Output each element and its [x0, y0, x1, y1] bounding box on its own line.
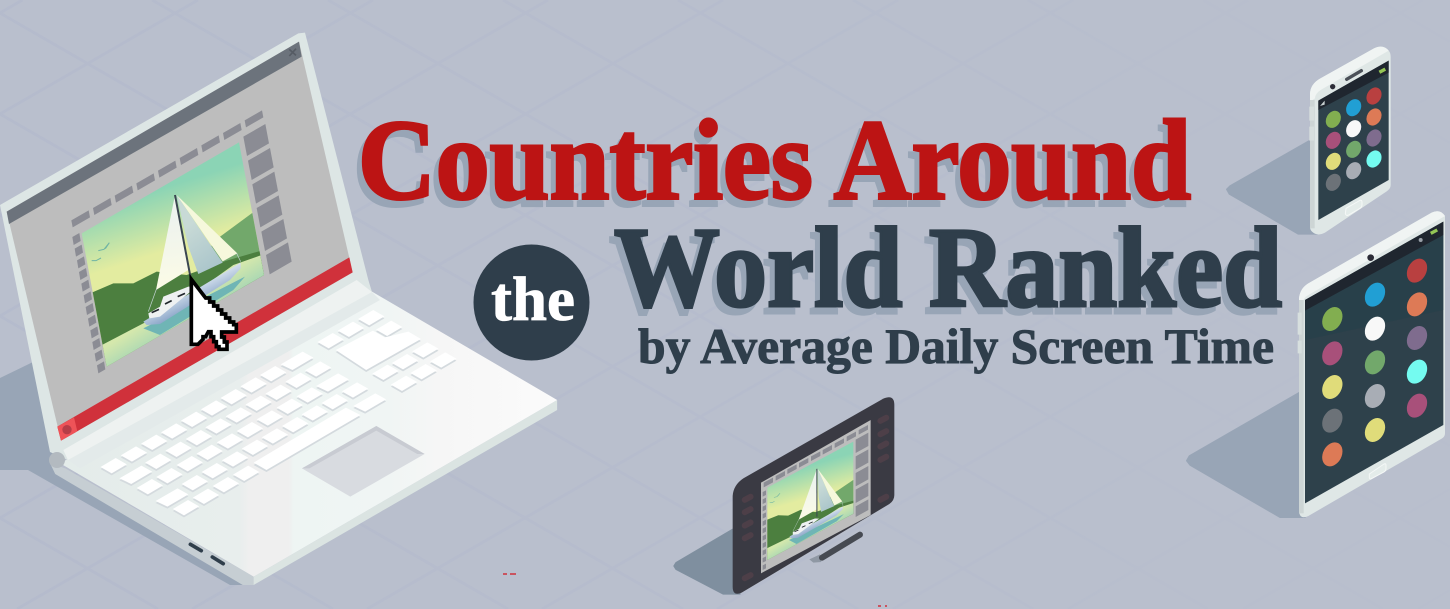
phone shadow — [1227, 140, 1317, 234]
drawing tablet pen — [809, 535, 860, 563]
laptop base — [50, 286, 557, 585]
tablet wifi — [1419, 238, 1423, 242]
close icon — [289, 49, 296, 56]
red task bar — [57, 257, 353, 441]
phone screen — [1318, 61, 1389, 220]
mouse cursor — [191, 279, 236, 349]
right panel — [243, 124, 292, 274]
tablet side buttons — [1298, 313, 1302, 353]
laptop lid and screen — [0, 33, 380, 468]
sailboat picture — [67, 133, 273, 373]
badge: the: the — [491, 266, 575, 334]
drawing tablet screen — [761, 420, 871, 573]
tablet app icons — [1318, 255, 1431, 470]
subtitle: by Average Daily Screen Time — [638, 318, 1274, 374]
drawing tablet shadow — [674, 529, 740, 594]
phone signal and battery — [1320, 101, 1325, 106]
tablet — [1187, 211, 1445, 517]
hinge — [49, 452, 65, 468]
tablet body — [1299, 211, 1445, 517]
drawing tablet body — [733, 397, 894, 594]
laptop shadow — [0, 362, 251, 585]
drawing tablet toolbars — [764, 425, 868, 487]
drawing tablet buttons — [741, 414, 890, 582]
touchpad — [302, 426, 425, 497]
keyboard — [101, 352, 386, 517]
phone side buttons — [1309, 107, 1314, 141]
phone app icons — [1323, 85, 1385, 194]
phone — [1227, 47, 1391, 234]
stray red marks — [503, 574, 887, 606]
title bar — [7, 42, 302, 224]
phone speaker and camera — [1347, 71, 1361, 79]
tablet shadow — [1187, 393, 1305, 517]
keypad — [317, 310, 456, 393]
tablet status icons — [1430, 228, 1438, 235]
tablet screen — [1305, 222, 1443, 503]
tablet camera — [1367, 254, 1374, 261]
left toolbar — [72, 233, 105, 373]
title: Countries Around: Countries Around — [358, 96, 1191, 224]
top toolbar tabs — [71, 110, 263, 227]
phone home button — [1345, 200, 1362, 215]
drawing tablet — [674, 397, 894, 594]
usb ports — [190, 544, 223, 564]
title: World Ranked: World Ranked — [614, 204, 1282, 331]
badge: the — [474, 244, 590, 360]
tablet home button — [1369, 464, 1386, 479]
phone body — [1310, 47, 1391, 234]
drawing tablet sailboat picture — [747, 434, 871, 567]
laptop — [0, 33, 557, 585]
